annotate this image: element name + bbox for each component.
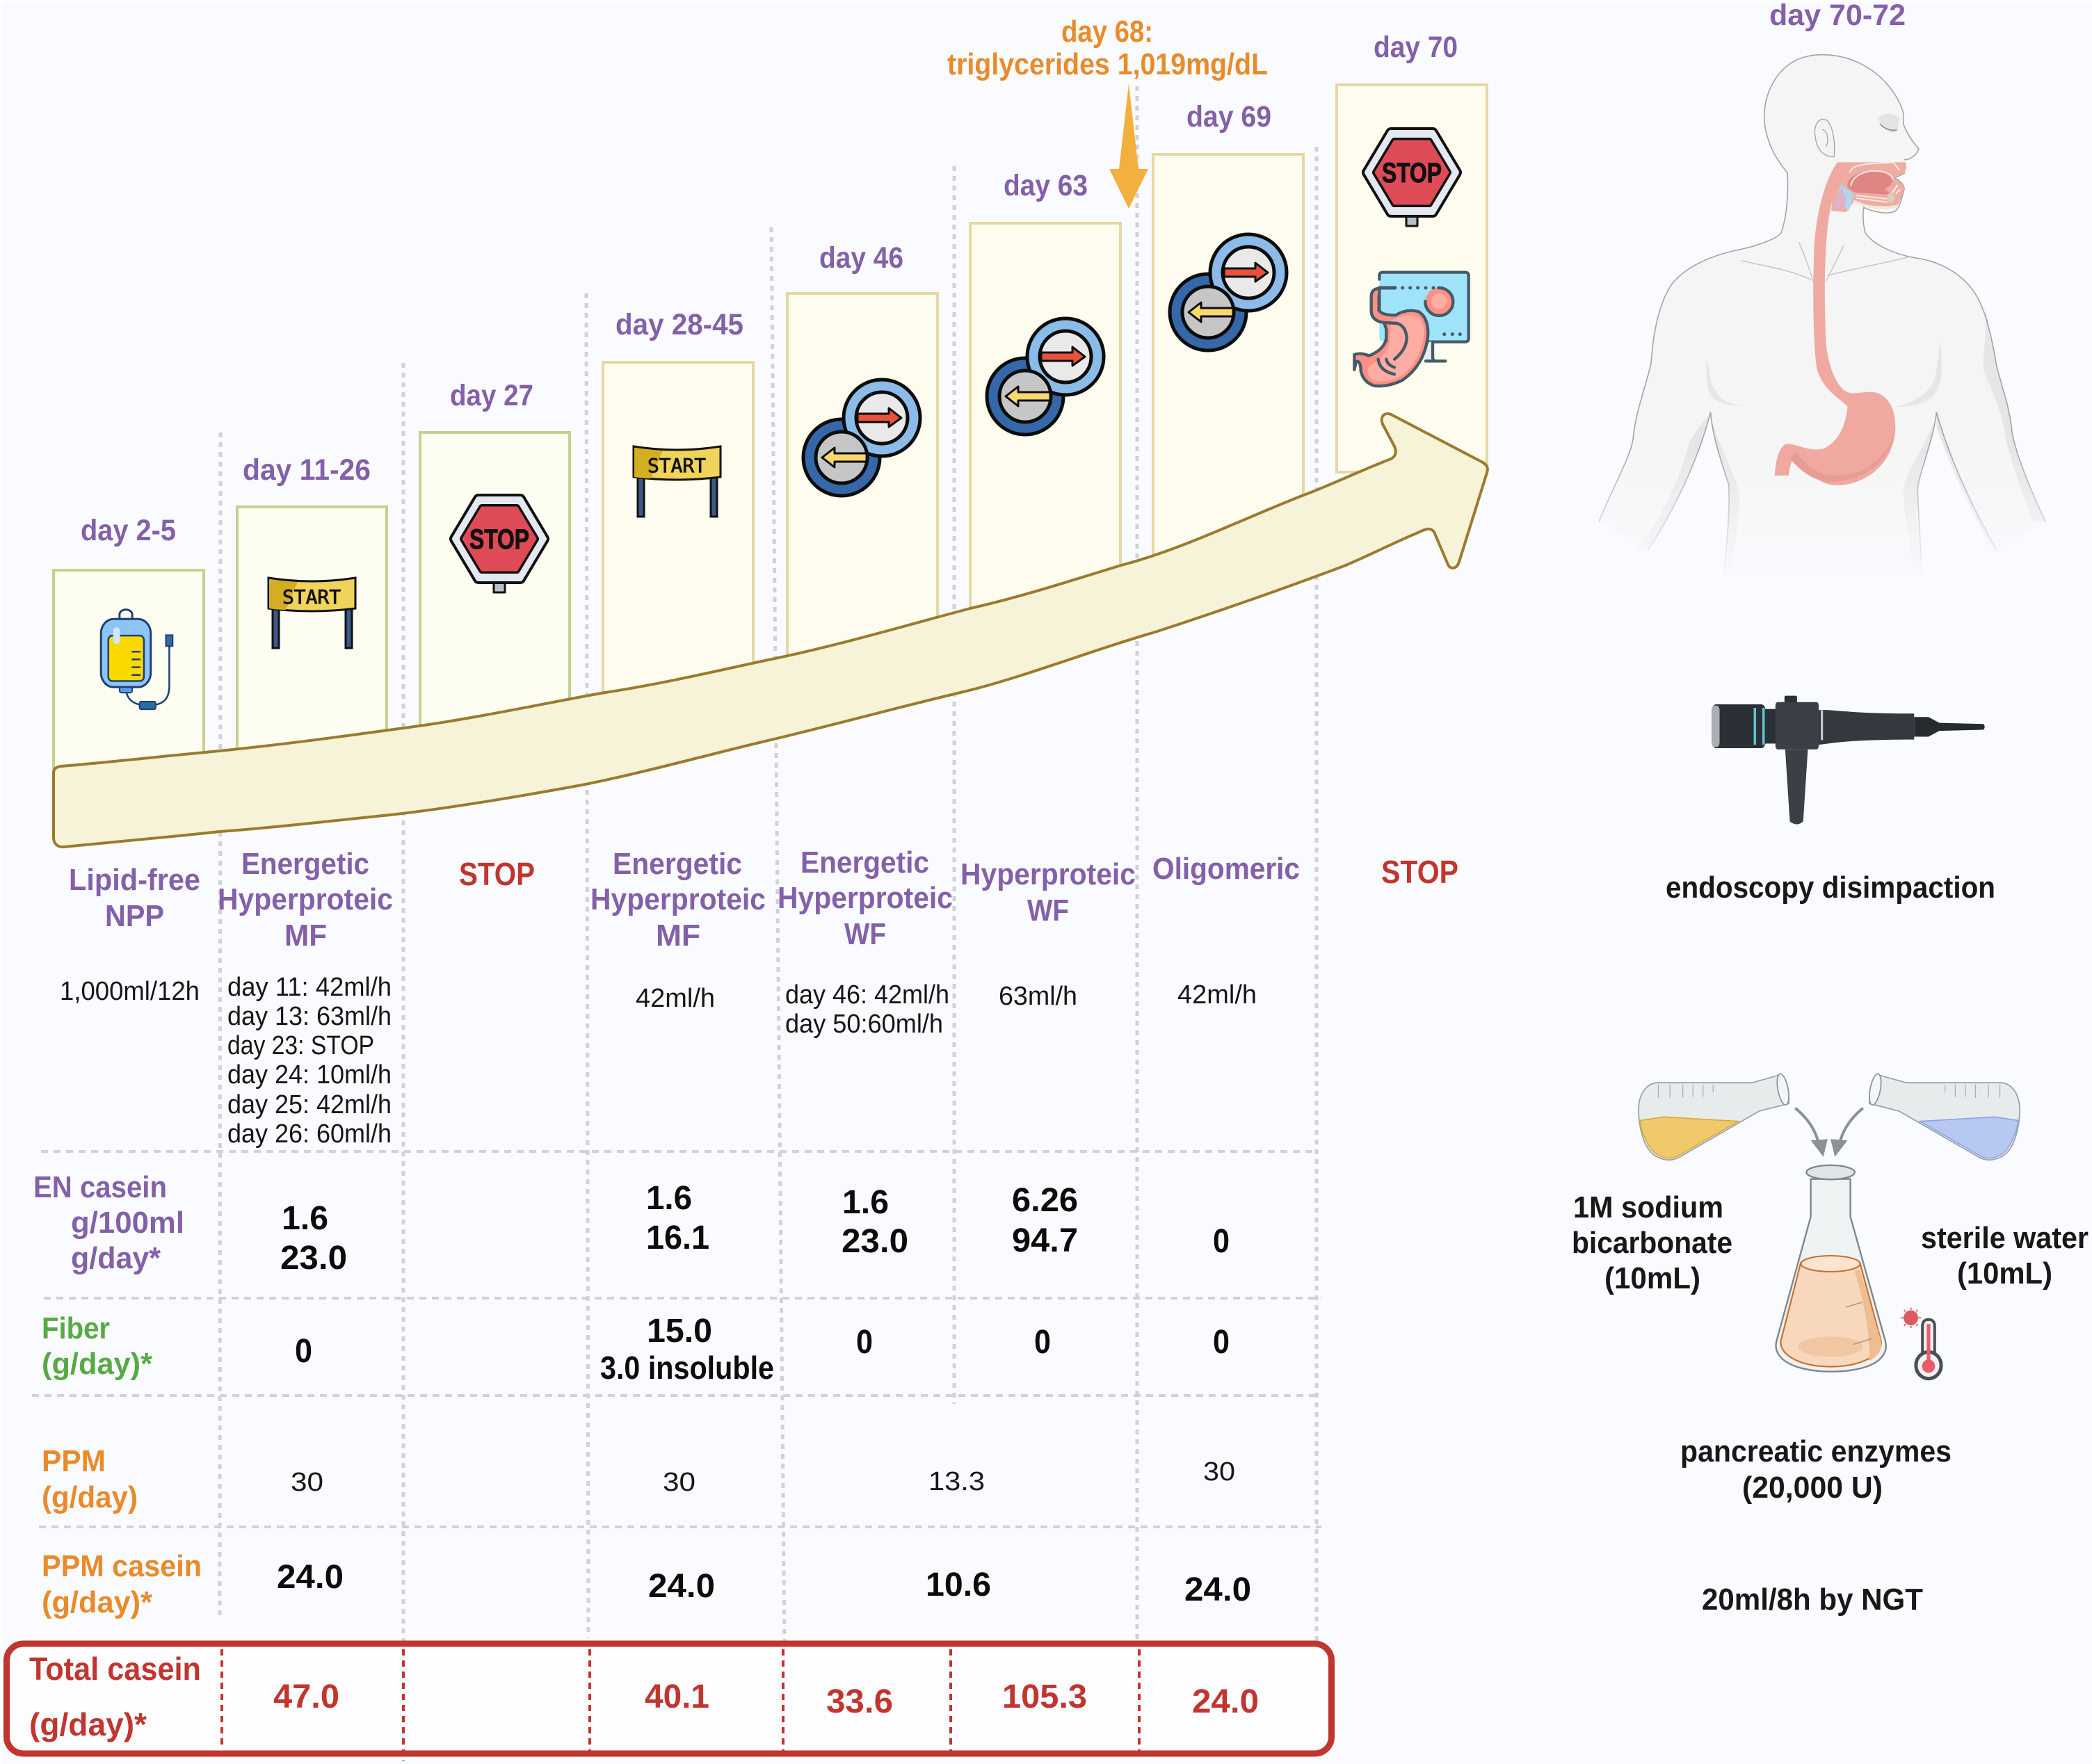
row: fiber: 0 [295,1333,312,1370]
panel: total casein row: 40.1 [645,1678,709,1715]
label: endoscopy disimpaction: endoscopy disimpaction [1666,871,1995,905]
day labels: day 2-5 [81,514,176,547]
formula names row: MF [284,919,327,953]
row: PPM casein: 10.6 [926,1567,991,1603]
label: pancreatic enzymes [1680,1434,1952,1505]
icon: STOP sign [455,499,544,592]
icon: STOP sign [1367,133,1456,226]
formula names row: STOP [459,856,535,892]
infusion rates row: day 13: 63ml/h [227,1002,392,1031]
row: fiber [42,1311,1230,1386]
row: fiber: (g/day)* [42,1347,153,1381]
row: EN casein: 6.26 [1012,1182,1078,1219]
infusion rates row: 1,000ml/12h [60,977,200,1006]
icon: START sign: START [282,585,341,608]
thermometer [1901,1308,1941,1379]
illustration: human torso with esophagus and stomach [1599,55,2045,582]
row: fiber: Fiber [42,1311,110,1345]
row: fiber: 0 [1034,1324,1051,1361]
formula names row: Hyperproteic [218,882,393,916]
icon: formula exchange arrows, day 69 [1170,234,1287,350]
panel: total casein row: Total casein [29,1651,201,1687]
row: EN casein: 16.1 [646,1220,709,1256]
formula names row: WF [844,917,886,951]
row: fiber: 3.0 insoluble [600,1350,774,1386]
row: fiber: 0 [856,1324,873,1361]
row: PPM casein: 24.0 [648,1568,715,1605]
pouring arrows [1795,1108,1863,1144]
row: EN casein: 94.7 [1012,1222,1078,1259]
icon: START sign [634,446,721,517]
formula names row: Energetic [241,847,369,881]
day labels: day 27 [450,379,533,412]
panel: total casein row: 33.6 [826,1683,893,1720]
row: PPM casein: 24.0 [277,1559,344,1596]
icon: formula exchange arrows, day 46 [803,380,920,496]
row: fiber: 0 [1213,1324,1230,1361]
row: EN casein: g/100ml [71,1206,184,1240]
row: PPM casein [42,1549,1251,1619]
illustration: flasks and reagent mixing [1639,1072,2020,1379]
icon: formula exchange arrows, day 63 [987,318,1104,435]
panel: total casein row: 47.0 [273,1678,339,1715]
row: EN casein: 23.0 [280,1240,347,1277]
formula names row: Lipid-free [69,863,200,897]
illustration: endoscope [1712,696,1985,824]
formula names row: Oligomeric [1152,852,1300,886]
label: sterile water: (10mL) [1957,1256,2052,1290]
icon: IV feeding bag [101,610,172,709]
day labels: day 69 [1186,100,1271,133]
infusion rates row: day 25: 42ml/h [227,1090,392,1119]
infusion rates row: 42ml/h [636,984,715,1013]
row: EN casein: 1.6 [282,1200,328,1237]
row: PPM: 30 [1203,1457,1235,1487]
row: PPM casein: PPM casein [42,1549,202,1583]
formula names row: Hyperproteic [778,881,953,915]
formula names row: Hyperproteic [590,882,766,916]
row: EN casein: 23.0 [842,1223,908,1260]
panel: timeline step bars [54,85,1487,800]
row: PPM [42,1444,1235,1514]
row: PPM: 30 [291,1468,323,1497]
row: EN casein [33,1170,1230,1277]
label: pancreatic enzymes: pancreatic enzymes [1680,1434,1952,1468]
label: sodium bicarbonate [1572,1190,1732,1295]
day labels: day 11-26 [243,453,371,487]
row: PPM casein: (g/day)* [42,1585,153,1619]
row: EN casein: 1.6 [646,1180,692,1217]
infusion rates row: day 24: 10ml/h [227,1060,392,1090]
formula names row: Hyperproteic [960,857,1136,891]
mixing flask [1776,1165,1886,1372]
formula names row: WF [1027,893,1069,928]
panel: total casein row: (g/day)* [29,1706,147,1742]
heading: day 68 triglycerides: triglycerides 1,019mg/dL [947,47,1268,81]
formula names row [69,845,1458,953]
infusion rates row: 63ml/h [999,982,1077,1011]
day labels: day 70 [1374,31,1458,64]
icon: stomach with monitor [1354,273,1469,386]
infusion rates row [60,973,1257,1149]
day labels: day 28-45 [615,308,743,341]
heading: day 68 triglycerides: day 68: [1061,15,1153,49]
panel: total casein row: 105.3 [1002,1678,1087,1715]
row: PPM: PPM [42,1444,106,1478]
row: EN casein: 1.6 [842,1184,889,1221]
row: EN casein: EN casein [33,1170,167,1204]
label: dosing by NGT: 20ml/8h by NGT [1702,1583,1923,1617]
infusion rates row: day 46: 42ml/h [785,980,949,1010]
panel: total casein row [7,1644,1331,1761]
day labels: day 46 [819,241,903,275]
formula names row: NPP [105,899,164,933]
row: PPM casein: 24.0 [1184,1571,1251,1608]
arrow: progression arrow [54,414,1488,847]
panel: total casein row: 24.0 [1192,1683,1259,1720]
right tilted flask [1867,1072,2020,1160]
label: sodium bicarbonate: 1M sodium [1573,1190,1723,1224]
infusion rates row: day 26: 60ml/h [227,1119,392,1149]
infusion rates row: day 50:60ml/h [785,1010,943,1039]
day labels: day 63 [1004,169,1088,202]
heading: day 68 triglycerides [947,15,1268,81]
formula names row: Energetic [613,847,742,881]
day labels [81,0,1906,547]
formula names row: STOP [1381,854,1458,890]
infusion rates row: day 23: STOP [227,1031,374,1060]
icon: STOP sign: STOP [1382,158,1442,188]
row: EN casein: 0 [1213,1223,1230,1260]
mouth and pharynx anatomy [1831,162,1906,212]
left tilted flask [1639,1072,1791,1160]
formula names row: Energetic [800,845,929,880]
esophagus and stomach [1775,163,1895,485]
row: PPM: 30 [663,1468,695,1497]
row: fiber: 15.0 [647,1313,712,1350]
row: EN casein: g/day* [71,1241,161,1275]
icon: START sign: START [647,454,706,477]
infusion rates row: 42ml/h [1177,980,1257,1010]
formula names row: MF [656,919,700,953]
icon: START sign [268,578,355,648]
arrow: day 68 marker [1109,83,1148,209]
row: PPM: 13.3 [928,1467,985,1496]
label: sodium bicarbonate: (10mL) [1604,1261,1700,1295]
label: sodium bicarbonate: bicarbonate [1572,1226,1732,1260]
label: sterile water [1921,1221,2089,1290]
label: pancreatic enzymes: (20,000 U) [1742,1471,1883,1505]
row: PPM: (g/day) [42,1480,138,1514]
infusion rates row: day 11: 42ml/h [227,973,392,1002]
icon: STOP sign: STOP [469,524,529,555]
